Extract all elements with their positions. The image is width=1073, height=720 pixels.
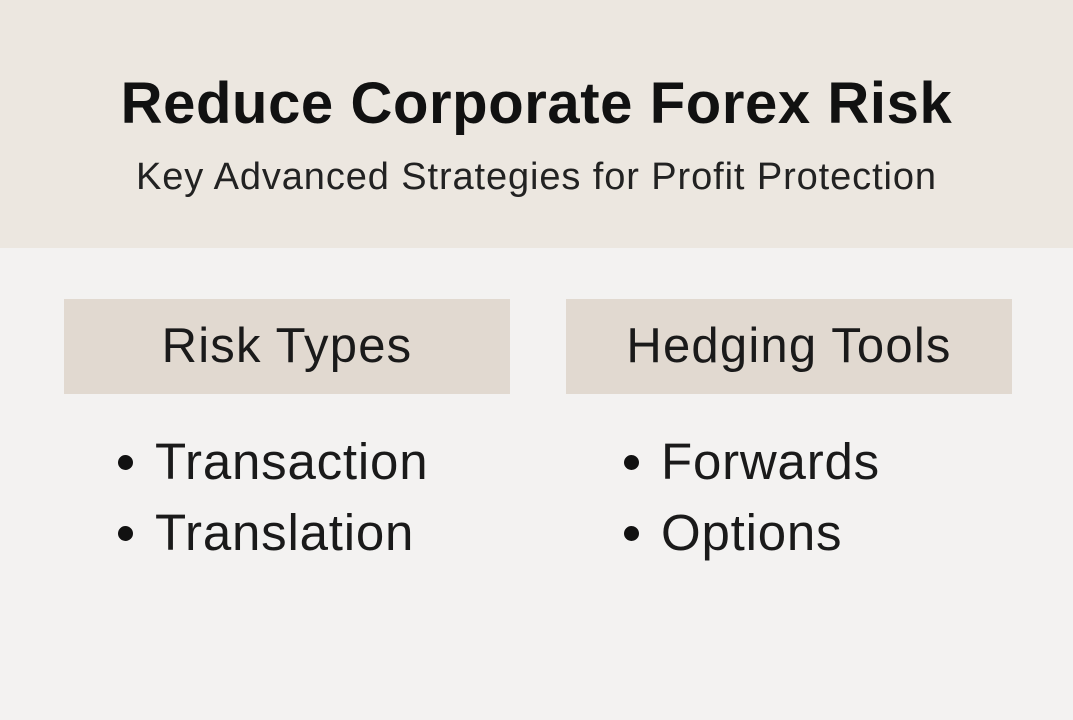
panel heading: Hedging Tools: Hedging Tools — [626, 319, 952, 373]
list: hedging tools — [624, 433, 880, 561]
list: risk types — [118, 433, 428, 561]
panel heading: Hedging Tools — [566, 299, 1012, 394]
panel heading: Risk Types: Risk Types — [162, 319, 412, 373]
list: risk types: Translation — [155, 504, 414, 561]
header band — [0, 0, 1073, 248]
list: hedging tools: Forwards — [661, 433, 880, 490]
subtitle: Key Advanced Strategies for Profit Protection — [136, 156, 937, 198]
list: risk types: Transaction — [155, 433, 428, 490]
panel heading: Risk Types — [64, 299, 510, 394]
title: Reduce Corporate Forex Risk — [121, 71, 952, 136]
list: hedging tools: Options — [661, 504, 842, 561]
